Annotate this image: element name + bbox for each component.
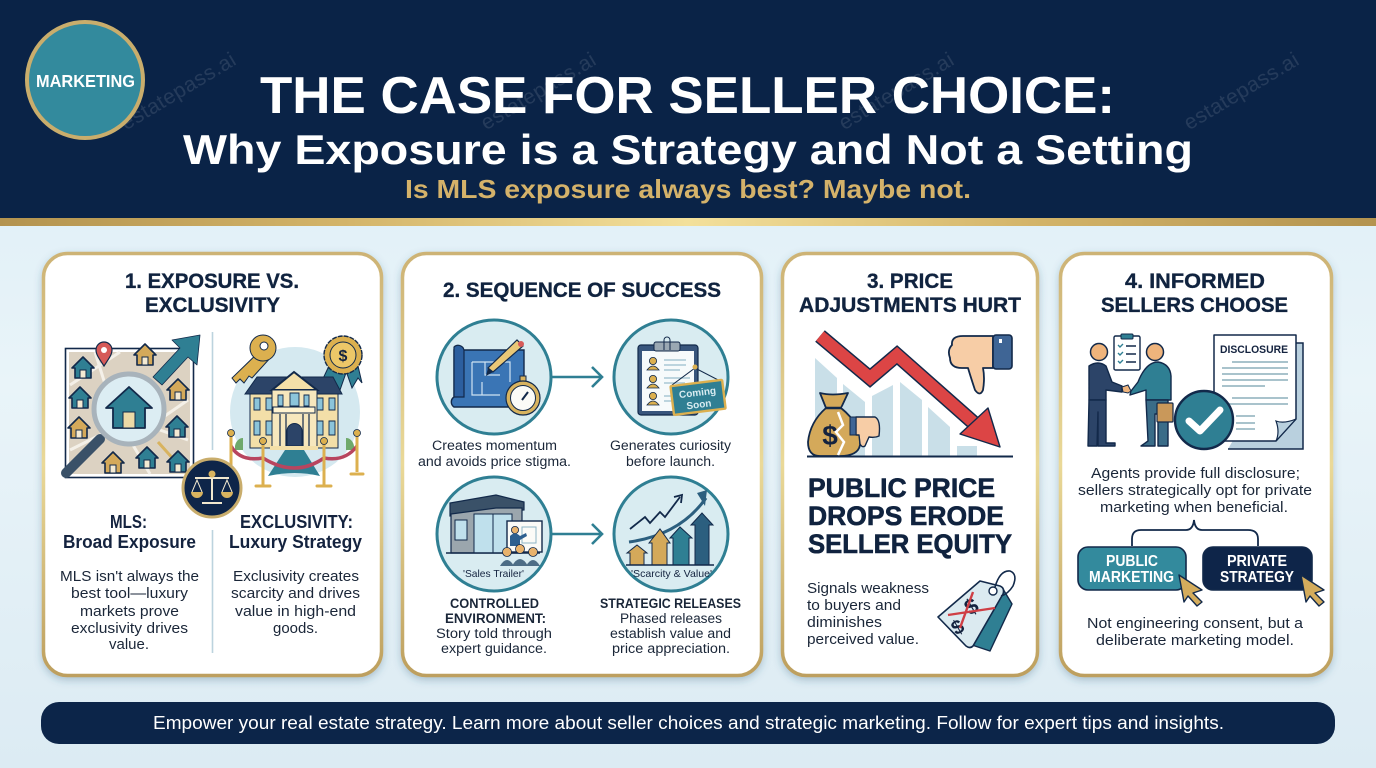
button: private strategy: STRATEGY: [1220, 569, 1294, 586]
icon: mansion with key, rosette and ropes: [225, 335, 363, 486]
text: signals weakness: Signals weakness: [807, 581, 929, 597]
column: exclusivity: scarcity and drives: [231, 586, 360, 602]
icon: sales trailer: [437, 477, 551, 591]
icon: clipboard and coming soon sign: Soon: [686, 398, 712, 412]
tagline: Is MLS exposure always best? Maybe not.: [405, 174, 971, 204]
subtitle: Why Exposure is a Strategy and Not a Setting: [183, 126, 1193, 173]
heading: panel 1: EXCLUSIVITY: [145, 293, 280, 317]
column: exclusivity: Exclusivity creates: [233, 569, 359, 585]
caption: strategic releases: [600, 596, 741, 656]
column: MLS: value.: [109, 637, 149, 653]
panel: informed sellers choose: [1060, 254, 1332, 676]
column: exclusivity: goods.: [273, 621, 318, 637]
text: signals weakness: diminishes: [807, 615, 882, 631]
heading: panel 2: 2. SEQUENCE OF SUCCESS: [443, 278, 721, 302]
text: disclosure explanation: [1078, 466, 1312, 516]
header banner: [0, 0, 1376, 226]
icon: cracked money bag with thumb: $: [822, 420, 838, 451]
caption: controlled environment: CONTROLLED: [450, 596, 539, 611]
column: MLS: exclusivity drives: [71, 621, 188, 637]
icon: check circle: [1175, 391, 1233, 449]
icon: scarcity and value chart: 'Scarcity & Value': [631, 568, 712, 580]
title: THE CASE FOR SELLER CHOICE:: [260, 67, 1115, 125]
text: deliberate model: deliberate marketing model.: [1096, 633, 1294, 649]
heading: panel 4: SELLERS CHOOSE: [1101, 293, 1288, 317]
icon: thumbs down large: [949, 335, 1012, 394]
caption: step one: and avoids price stigma.: [418, 454, 571, 469]
panel: exposure vs exclusivity: [44, 254, 382, 676]
icon: slashed price tag: $: [960, 593, 983, 620]
column: exclusivity: [229, 512, 362, 637]
badge: marketing: MARKETING: [36, 71, 135, 91]
icon: cracked money bag with thumb: [808, 393, 880, 456]
icon: mansion with key, rosette and ropes: $: [339, 348, 348, 365]
icon: blueprint and stopwatch: [437, 320, 551, 434]
caption: step two: [610, 438, 731, 469]
caption: strategic releases: price appreciation.: [612, 641, 730, 656]
statement: public price drops: SELLER EQUITY: [808, 529, 1012, 559]
caption: step one: Creates momentum: [432, 438, 557, 453]
watermarks: estatepass.ai: [835, 48, 958, 135]
arrow: step one to two: [552, 367, 602, 387]
column: MLS: [60, 512, 199, 653]
button: public marketing: PUBLIC: [1106, 553, 1158, 570]
divider upper and lower: [212, 332, 214, 653]
column: MLS: MLS isn't always the: [60, 569, 199, 585]
panel: sequence of success: [402, 254, 762, 676]
button: public marketing: MARKETING: [1089, 569, 1174, 586]
icon: disclosure document: DISCLOSURE: [1220, 344, 1288, 356]
watermarks: estatepass.ai: [477, 48, 600, 135]
footer banner: [41, 702, 1335, 744]
text: signals weakness: to buyers and: [807, 598, 901, 614]
heading: panel 3: 3. PRICE: [867, 269, 953, 293]
column: MLS: best tool—luxury: [71, 586, 189, 602]
icon: slashed price tag: [938, 571, 1015, 651]
column: MLS: MLS:: [110, 512, 147, 532]
heading: panel 3: [799, 269, 1021, 317]
caption: step two: before launch.: [626, 454, 715, 469]
heading: panel 4: [1101, 269, 1288, 317]
text: signals weakness: perceived value.: [807, 632, 919, 648]
text: deliberate model: Not engineering consent, but a: [1087, 616, 1304, 632]
watermarks: estatepass.ai: [117, 48, 240, 135]
column: exclusivity: EXCLUSIVITY:: [240, 512, 353, 532]
caption: strategic releases: establish value and: [610, 626, 731, 641]
heading: panel 3: ADJUSTMENTS HURT: [799, 293, 1021, 317]
button: private strategy: PRIVATE: [1227, 553, 1287, 570]
arrow: step three to four: [552, 524, 602, 544]
icon: map with magnifier and arrow: [66, 335, 200, 478]
caption: controlled environment: ENVIRONMENT:: [445, 611, 546, 626]
footer banner: Empower your real estate strategy. Learn more about seller choices and strategic marketing. Follow for expert tips and insights.: [153, 712, 1224, 733]
chart: falling bars with red arrow: [807, 336, 1013, 456]
statement: public price drops: [808, 473, 1012, 559]
badge: marketing: [27, 22, 143, 138]
icon: clipboard and coming soon sign: [614, 320, 728, 434]
caption: controlled environment: expert guidance.: [441, 641, 547, 656]
text: deliberate model: [1087, 616, 1304, 649]
caption: controlled environment: [436, 596, 552, 656]
column: exclusivity: Luxury Strategy: [229, 532, 362, 552]
column: exclusivity: value in high-end: [235, 604, 356, 620]
statement: public price drops: DROPS ERODE: [808, 501, 1004, 531]
watermarks: [117, 48, 1303, 135]
caption: strategic releases: STRATEGIC RELEASES: [600, 596, 741, 611]
column: MLS: markets prove: [80, 604, 179, 620]
caption: controlled environment: Story told through: [436, 626, 552, 641]
heading: panel 1: [125, 269, 299, 317]
icon: slashed price tag: $: [948, 615, 968, 640]
icon: handshake with clipboard: [1088, 334, 1173, 446]
panel: price adjustments hurt: [782, 254, 1038, 676]
icon: sales trailer: 'Sales Trailer': [463, 568, 524, 580]
heading: panel 4: 4. INFORMED: [1125, 269, 1265, 293]
icon: clipboard and coming soon sign: Coming: [678, 386, 717, 401]
watermarks: estatepass.ai: [1180, 48, 1303, 135]
statement: public price drops: PUBLIC PRICE: [808, 473, 995, 503]
caption: step one: [418, 438, 571, 469]
text: disclosure explanation: marketing when beneficial.: [1100, 500, 1288, 516]
text: disclosure explanation: sellers strategically opt for private: [1078, 483, 1312, 499]
icon: disclosure document: [1214, 335, 1303, 449]
column: MLS: Broad Exposure: [63, 532, 196, 552]
text: disclosure explanation: Agents provide full disclosure;: [1091, 466, 1300, 482]
button: private strategy: [1203, 547, 1324, 606]
caption: strategic releases: Phased releases: [620, 611, 722, 626]
text: signals weakness: [807, 581, 929, 648]
icon: balance scale badge: [183, 459, 241, 517]
icon: scarcity and value chart: [614, 477, 728, 591]
button: public marketing: [1078, 547, 1202, 606]
heading: panel 1: 1. EXPOSURE VS.: [125, 269, 299, 293]
bracket connector: [1132, 520, 1258, 546]
caption: step two: Generates curiosity: [610, 438, 731, 453]
